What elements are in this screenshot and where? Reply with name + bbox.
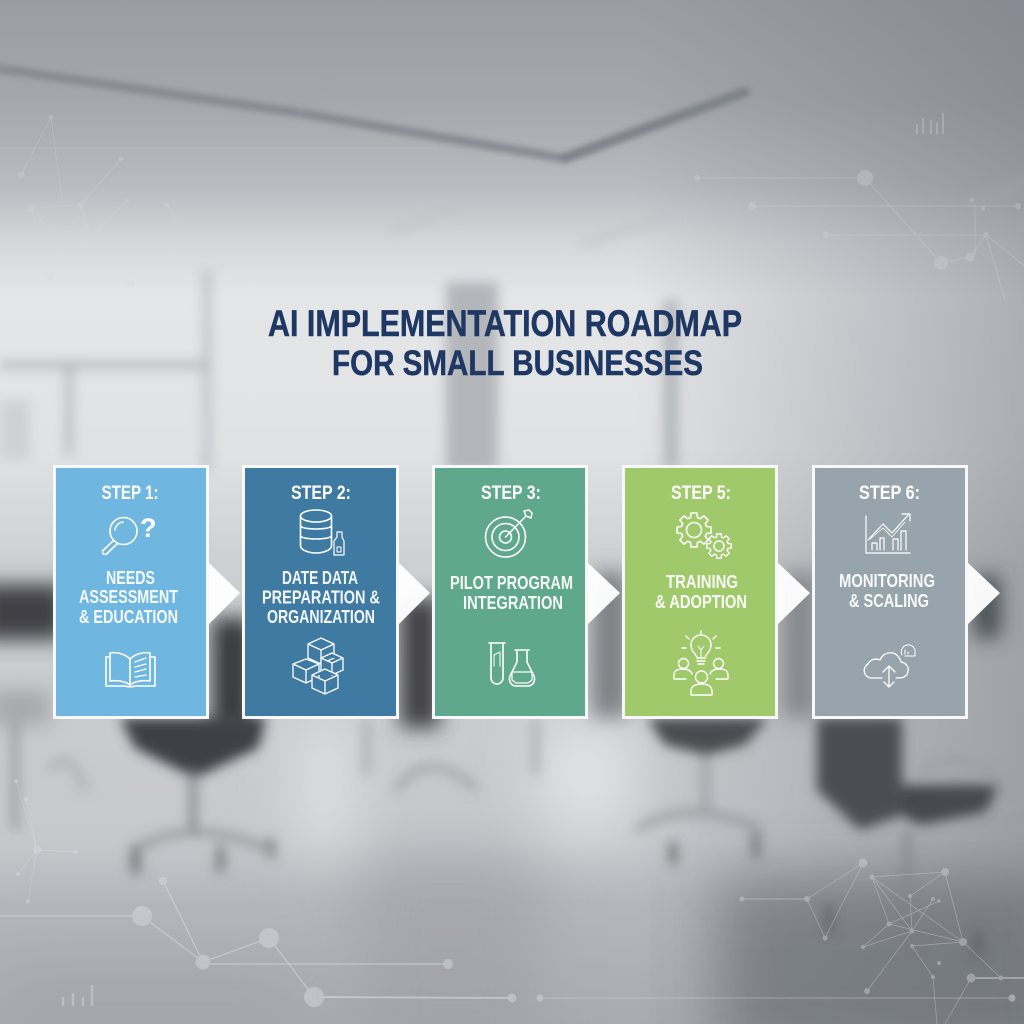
network decoration: top left — [0, 114, 438, 287]
panel: step 5 training — [624, 466, 776, 718]
icon: lightbulb over team — [674, 631, 728, 695]
panel: step 6 monitoring — [814, 466, 966, 718]
step 1 description: & EDUCATION — [79, 607, 178, 627]
icon: database with lock — [300, 510, 344, 555]
title — [268, 303, 742, 383]
step 3 description: INTEGRATION — [463, 593, 563, 613]
arrow: step 5 to step 6 — [777, 562, 810, 625]
step 6 heading: STEP 6: — [859, 483, 920, 504]
network decoration: bottom left — [0, 779, 1016, 1007]
window frames and pillars — [0, 362, 210, 368]
panel: step 3 pilot program — [434, 466, 586, 718]
step 1 heading: STEP 1: — [102, 483, 158, 504]
step 1 description: NEEDS — [106, 568, 155, 588]
step 5 heading: STEP 5: — [671, 483, 731, 504]
panel: step 2 data preparation — [244, 466, 398, 718]
bar glyph: top right — [917, 113, 943, 134]
title: FOR SMALL BUSINESSES — [332, 344, 703, 383]
step 5 description: & ADOPTION — [655, 592, 747, 612]
title: AI IMPLEMENTATION ROADMAP — [268, 303, 742, 344]
step 1 description — [79, 568, 178, 627]
panel: step 1 needs assessment — [54, 466, 208, 718]
step 3 description: PILOT PROGRAM — [450, 573, 573, 593]
ceiling beam — [0, 68, 745, 158]
step 3 description — [450, 573, 573, 613]
icon: magnifier with question mark — [102, 513, 156, 555]
step 6 description — [839, 571, 935, 611]
network decoration: top right — [694, 170, 1024, 300]
icon: test tube and flask — [489, 643, 535, 686]
icon: magnifier with question mark: ? — [140, 513, 156, 543]
arrow: step 3 to step 5 — [587, 562, 620, 625]
step 2 heading: STEP 2: — [291, 483, 351, 504]
icon: open book — [106, 653, 155, 687]
step 6 description: & SCALING — [849, 591, 929, 611]
icon: target with arrow — [486, 510, 532, 557]
step 6 description: MONITORING — [839, 571, 935, 591]
step 2 description: PREPARATION & — [262, 588, 380, 608]
step 5 description: TRAINING — [666, 572, 738, 592]
icon: growth chart — [866, 514, 910, 553]
arrow: step 1 to step 2 — [208, 562, 240, 625]
step 5 description — [655, 572, 747, 612]
step 2 description: DATE DATA — [282, 568, 358, 588]
step 1 description: ASSESSMENT — [79, 587, 178, 607]
step 2 description: ORGANIZATION — [267, 607, 375, 627]
icon: stack of boxes — [293, 638, 343, 694]
bar glyph: bottom left — [63, 985, 92, 1006]
icon: cloud with arrows — [864, 645, 915, 687]
icon: gears — [677, 513, 731, 558]
arrow: after step 6 — [967, 562, 1000, 625]
step 3 heading: STEP 3: — [481, 483, 541, 504]
step 2 description — [262, 568, 380, 627]
arrow: step 2 to step 3 — [398, 562, 430, 625]
network decoration: bottom right — [740, 858, 1024, 1024]
dark furniture — [0, 584, 65, 640]
